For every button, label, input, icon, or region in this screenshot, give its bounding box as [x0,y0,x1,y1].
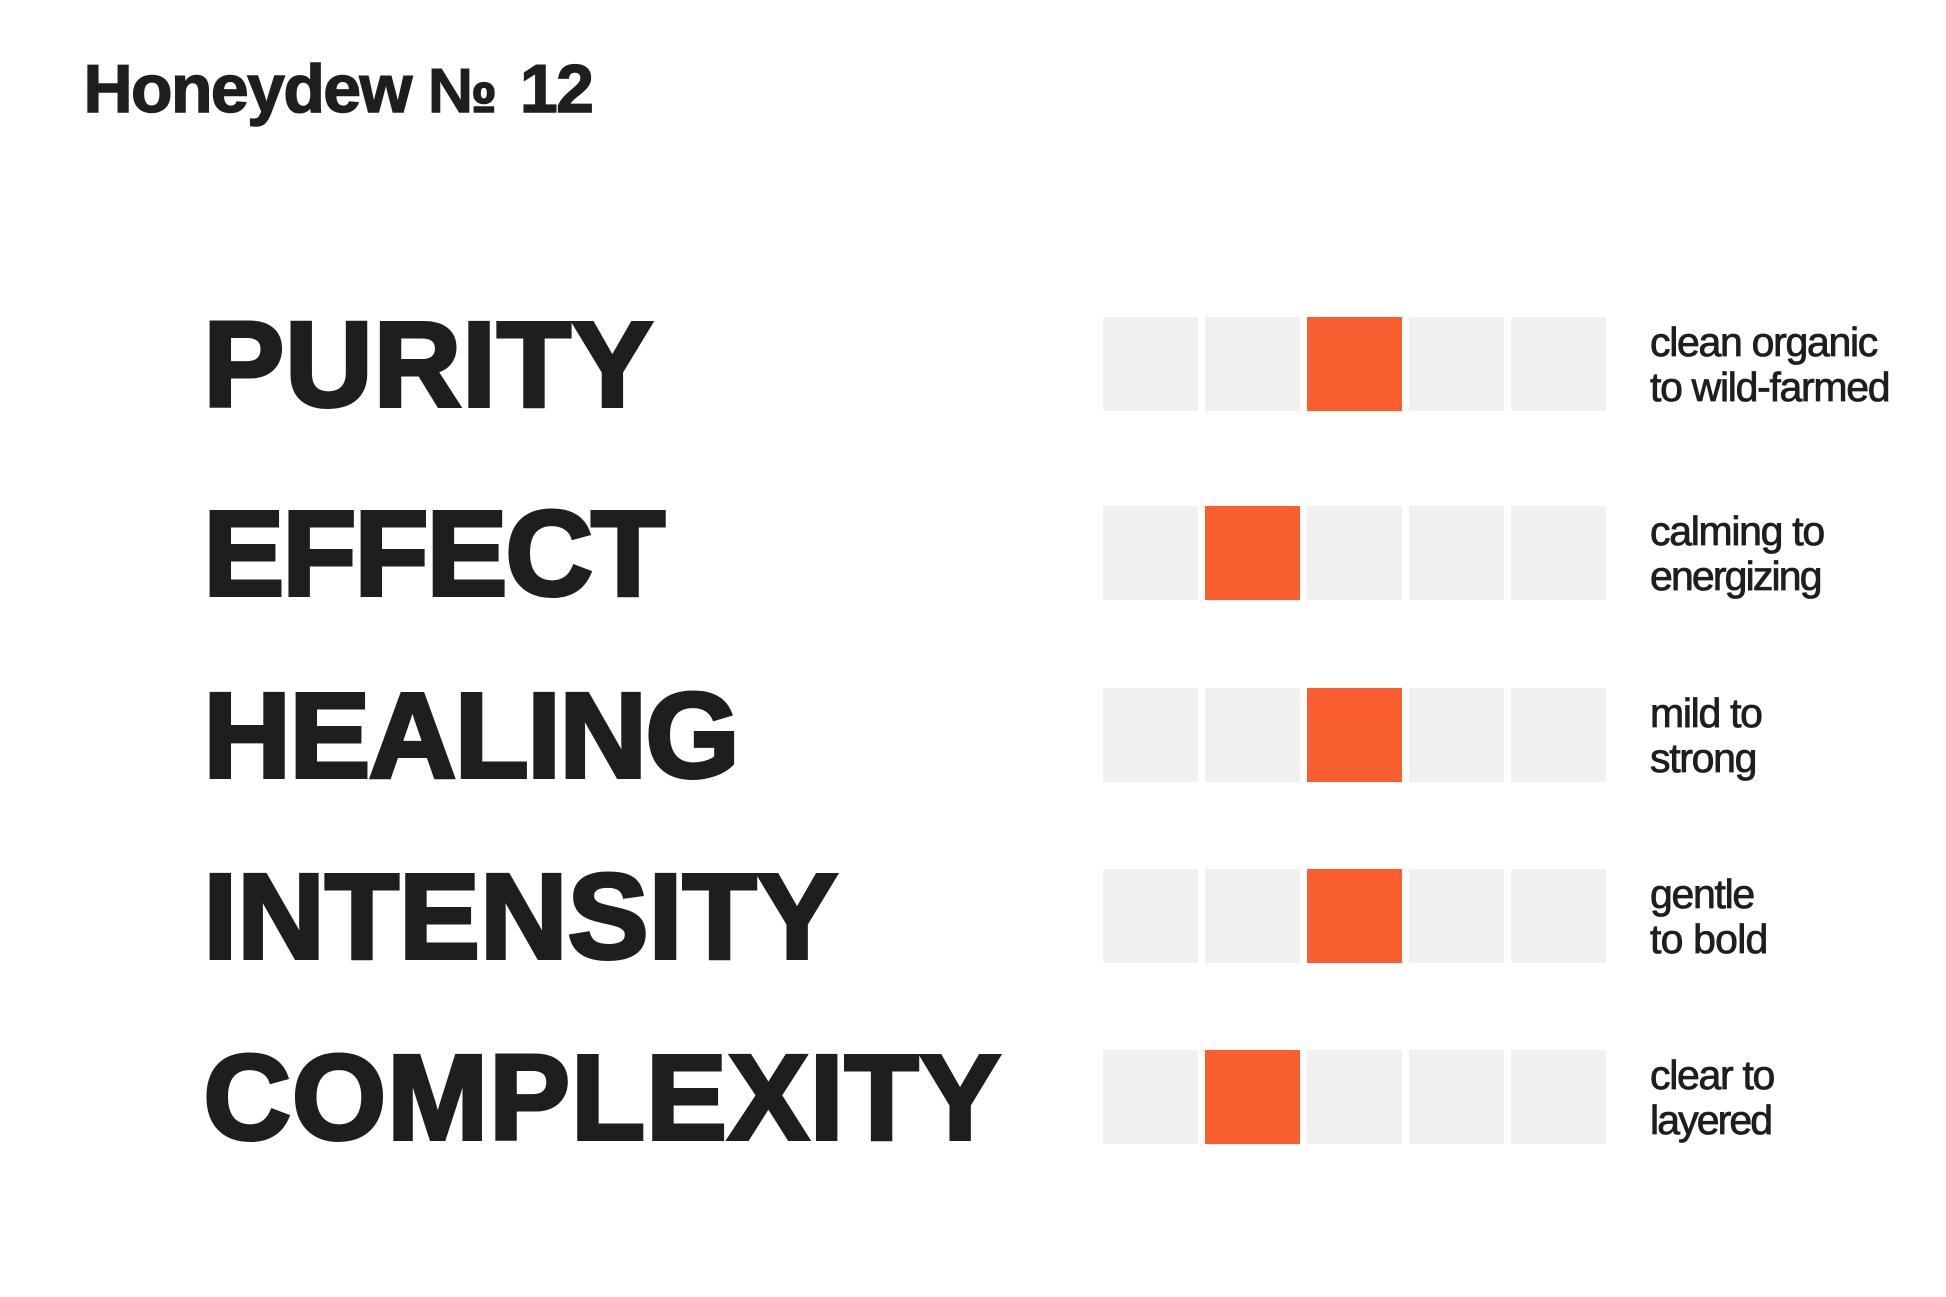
range text: effect: energizing [1650,553,1821,599]
range text: effect [1650,508,1824,599]
range text: intensity: gentle [1650,871,1754,917]
label: purity: PURITY [204,296,654,432]
label: complexity: COMPLEXITY [204,1029,1002,1165]
range text: complexity: layered [1650,1097,1771,1143]
scale: purity, marker at position 3 [1103,317,1606,411]
range text: purity [1650,319,1889,410]
row: healing [204,667,1762,803]
range text: complexity: clear to [1650,1052,1774,1098]
scale: intensity, marker at position 3 [1103,869,1606,963]
scale: effect, marker at position 2 [1103,506,1606,600]
range text: healing: strong [1650,735,1756,781]
row: intensity [204,848,1768,984]
label: effect: EFFECT [204,485,663,621]
range text: intensity [1650,871,1768,962]
row: complexity [204,1029,1774,1165]
title: Honeydew № 12 [84,51,592,127]
range text: purity: to wild-farmed [1650,364,1889,410]
range text: intensity: to bold [1650,916,1768,962]
row: purity [204,296,1889,432]
label: intensity: INTENSITY [204,848,838,984]
label: healing: HEALING [204,667,738,803]
scale: complexity, marker at position 2 [1103,1050,1606,1144]
range text: healing: mild to [1650,690,1762,736]
range text: purity: clean organic [1650,319,1877,365]
range text: effect: calming to [1650,508,1824,554]
scale: healing, marker at position 3 [1103,688,1606,782]
range text: healing [1650,690,1762,781]
range text: complexity [1650,1052,1774,1143]
row: effect [204,485,1824,621]
